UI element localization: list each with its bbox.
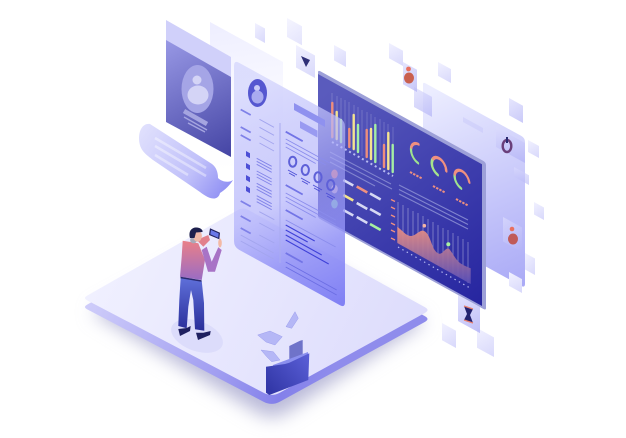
skill squares [246, 151, 250, 193]
platform top [85, 208, 428, 395]
donut captions [410, 172, 468, 206]
donut chart 3 [455, 167, 469, 193]
icon tile: user [403, 62, 417, 92]
right column title blocks [294, 103, 325, 138]
ring captions [288, 170, 335, 199]
speech bubble [139, 124, 233, 199]
arm left [197, 235, 210, 247]
hand [218, 238, 222, 248]
shoes [178, 326, 211, 340]
folder inner sheet [273, 352, 308, 371]
icon tile: power [496, 127, 525, 163]
panel: pale sheet behind resume [210, 22, 283, 210]
torso [180, 241, 205, 280]
person [166, 227, 228, 359]
donut chart 2 [432, 154, 446, 180]
left column lines [241, 119, 274, 259]
name lines [184, 111, 207, 124]
dashboard screen [318, 74, 482, 306]
highlighted lines [286, 225, 329, 264]
folder front [266, 353, 309, 395]
platform side [85, 217, 428, 404]
legs [178, 277, 204, 331]
icon tile: triangle [296, 45, 315, 78]
panel: profile card [166, 20, 231, 157]
text lines under bars [330, 152, 392, 189]
folder with papers [258, 312, 309, 395]
head [189, 227, 203, 243]
ground shadow [166, 313, 228, 359]
panel: resume sheet [234, 62, 345, 306]
card body [166, 40, 231, 157]
icon tile: hourglass [458, 295, 480, 333]
flying papers [258, 312, 298, 362]
text lines above area chart [399, 185, 468, 229]
area chart [391, 200, 471, 288]
tag dots [331, 170, 338, 208]
donut chart 1 [411, 140, 427, 168]
platform [85, 208, 428, 417]
belt [180, 278, 202, 281]
panel: right back sheet [423, 83, 525, 287]
avatar [248, 79, 267, 107]
folder back [289, 340, 303, 364]
column divider [279, 123, 281, 263]
floating tiles [255, 18, 544, 357]
card header band [166, 20, 231, 80]
skill rows [257, 158, 272, 210]
progress rings [289, 157, 334, 190]
icon tile: user lower [503, 217, 522, 252]
avatar [182, 65, 214, 113]
platform shadow [92, 225, 425, 417]
right column lines [286, 139, 336, 247]
resume background [234, 62, 345, 306]
left column headers [241, 110, 251, 234]
dashboard frame [318, 71, 486, 309]
panel: analytics dashboard [318, 71, 486, 309]
tablet [209, 228, 220, 239]
colored tags [343, 180, 381, 230]
arm right [202, 247, 222, 272]
bar chart [332, 93, 393, 176]
